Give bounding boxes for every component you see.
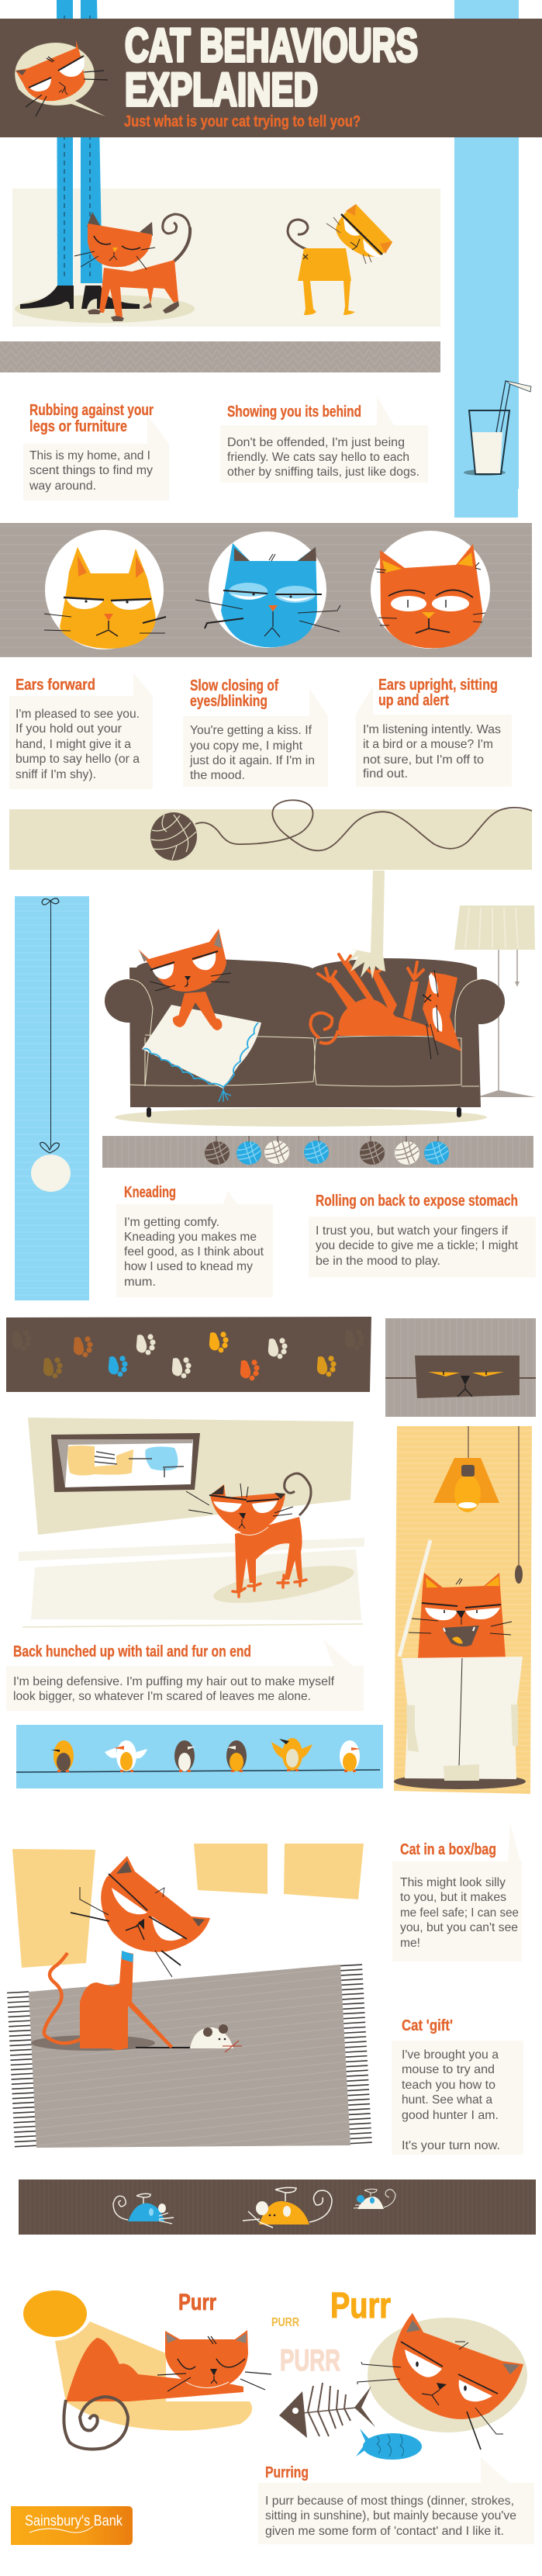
callout: ears forward: [9, 673, 153, 789]
title: EXPLAINED: [125, 64, 318, 116]
penguin 2: [105, 1740, 147, 1772]
callout: cat gift: I've brought you a: [402, 2048, 499, 2062]
callout: ears forward: Ears forward: [16, 677, 95, 694]
callout: cat in a box: Cat in a box/bag: [400, 1841, 496, 1858]
purr words: Purr: [178, 2290, 216, 2315]
purr words: [178, 2285, 391, 2377]
hanging blue panel with ball: [15, 896, 89, 1300]
callout: cat in a box: to you, but it makes: [400, 1891, 506, 1904]
yarn string: [195, 800, 532, 850]
callout: purring: [258, 2457, 534, 2544]
sleeping cat body: [66, 2338, 243, 2401]
floor lamp: [454, 905, 536, 1097]
callout: cat in a box: This might look silly: [400, 1876, 506, 1889]
callout: cat gift: good hunter I am.: [402, 2109, 499, 2122]
cat bed: [66, 2401, 252, 2431]
yellow mouse: [243, 2187, 332, 2228]
white mouse: [354, 2189, 395, 2209]
callout: showing behind: other by sniffing tails, just like dogs.: [227, 466, 419, 479]
sleeping cat head: [157, 2330, 271, 2391]
penguin 1: [51, 1740, 74, 1772]
sitting cat: [44, 1856, 210, 2050]
purr words: PURR: [271, 2316, 299, 2329]
callout: ears forward: If you hold out your: [16, 722, 123, 736]
callout: ears forward: hand, I might give it a: [16, 738, 131, 751]
callout: rolling on back: you decide to give me a tickle; I might: [316, 1239, 519, 1252]
callout: showing behind: [220, 396, 428, 483]
callout: kneading: I'm getting comfy.: [124, 1216, 219, 1229]
header banner: [0, 19, 542, 137]
framed abstract picture: [51, 1433, 200, 1492]
callout: slow closing of eyes: just do it again. If I'm in: [189, 754, 315, 767]
callout: rolling on back: be in the mood to play.: [316, 1255, 440, 1268]
rug scene with cat and mouse: [12, 1844, 364, 2148]
callout: cat gift: [371, 2017, 523, 2155]
callout: cat gift: It's your turn now.: [402, 2139, 500, 2152]
purr illustration left: sleeping cat in sun: [23, 2290, 271, 2449]
penguin 4: [226, 1740, 247, 1772]
blue cat head: slow blinking: [195, 531, 340, 648]
callout: kneading: mum.: [124, 1276, 156, 1289]
title: [125, 19, 418, 116]
callout: ears upright: it a bird or a mouse? I'm: [363, 738, 493, 751]
callout: ears upright: up and alert: [378, 692, 449, 709]
mouse: [190, 2024, 242, 2052]
pillow with blue trim: [142, 1005, 261, 1102]
rubbing orange cat: [74, 212, 190, 321]
callout: back hunched: [6, 1639, 364, 1711]
callout: purring: Purring: [265, 2464, 309, 2481]
rolling cat: [310, 954, 461, 1059]
penguin 3: [174, 1740, 195, 1772]
birds on a wire band: [16, 1725, 383, 1788]
callout: purring: I purr because of most things (dinner, strokes,: [265, 2495, 514, 2508]
callout: showing behind: Showing you its behind: [227, 403, 361, 421]
hunched orange cat: [186, 1473, 311, 1597]
callout: back hunched: Back hunched up with tail and fur on end: [13, 1643, 251, 1660]
callout: ears upright: [356, 677, 512, 787]
logo: Sainsbury's Bank: Sainsbury's Bank: [25, 2513, 123, 2529]
logo: Sainsbury's Bank: [11, 2506, 133, 2545]
yellow cat showing behind: [288, 204, 392, 315]
yarn balls band: [102, 1136, 533, 1168]
callout: kneading: [116, 1184, 273, 1297]
legs in blue trousers: [20, 0, 140, 309]
callout: slow closing of eyes: Slow closing of: [190, 677, 278, 694]
bag flap: [399, 1540, 430, 1657]
curled tail: [64, 2397, 128, 2449]
icon: yarn ball: [150, 812, 197, 860]
reaching arm and hand: [347, 871, 385, 979]
callout: ears forward: sniff if I'm shy).: [16, 768, 96, 781]
yellow cat head: ears forward: [44, 530, 166, 649]
dark cat peeking panel: [385, 1318, 536, 1417]
callout: ears upright: I'm listening intently. Was: [363, 723, 501, 736]
pendant lamp: [433, 1426, 523, 1584]
fish skeleton: [279, 2383, 375, 2438]
subtitle: Just what is your cat trying to tell you?: [124, 113, 361, 130]
orange cat in bag: [409, 1573, 512, 1658]
icon: glass of milk with straw: [464, 381, 531, 476]
purr words: Purr: [330, 2285, 391, 2325]
orange cat head: ears upright: [371, 531, 490, 649]
penguin 5: [271, 1738, 312, 1771]
sofa floor shadow: [115, 1108, 487, 1127]
callout: back hunched: I'm being defensive. I'm puffing my hair out to make myself: [13, 1675, 335, 1688]
callout: rubbing: scent things to find my: [29, 464, 153, 477]
purring cat head: [357, 2313, 527, 2450]
paw prints band: [6, 1317, 371, 1392]
decorative light blue column with glass of milk: [454, 0, 531, 518]
illustration: legs and cats scene: [12, 0, 440, 327]
callout: cat gift: mouse to try and: [402, 2063, 495, 2076]
callout: back hunched: look bigger, so whatever I'm scared of leaves me alone.: [13, 1690, 311, 1703]
callout: ears forward: bump to say hello (or a: [16, 753, 140, 766]
callout: ears upright: not sure, but I'm off to: [363, 753, 484, 767]
callout: cat gift: hunt. See what a: [402, 2093, 492, 2107]
callout: purring: sitting in sunshine), but mainly because you've: [265, 2509, 516, 2522]
wool band with yarn and string: [9, 800, 532, 870]
callout: cat gift: teach you how to: [402, 2079, 495, 2092]
wind-up mice band: [19, 2180, 536, 2235]
striped band with three cat heads: [0, 523, 532, 657]
callout: showing behind: friendly. We cats say hello to each: [227, 451, 409, 464]
callout: cat gift: Cat 'gift': [402, 2017, 453, 2034]
callout: slow closing of eyes: eyes/blinking: [190, 693, 268, 710]
purr words: PURR: [280, 2344, 340, 2377]
callout: slow closing of eyes: You're getting a kiss. If: [190, 724, 312, 737]
blue fish: [356, 2429, 422, 2460]
kneading cat: [138, 929, 231, 1030]
paper bag: [402, 1657, 523, 1781]
callout: kneading: Kneading you makes me: [124, 1231, 257, 1244]
callout: kneading: feel good, as I think about: [124, 1245, 264, 1259]
callout: ears upright: Ears upright, sitting: [378, 677, 498, 694]
callout: cat in a box: [392, 1823, 522, 1961]
callout: slow closing of eyes: you copy me, I might: [190, 739, 303, 753]
cat in bag panel: [394, 1426, 532, 1794]
penguin 6: [340, 1740, 361, 1772]
callout: purring: given me some form of 'contact' and I like it.: [265, 2525, 504, 2538]
callout: cat in a box: me feel safe; I can see: [400, 1906, 519, 1920]
callout: rubbing: [23, 402, 169, 500]
callout: rolling on back: I trust you, but watch your fingers if: [316, 1224, 509, 1238]
chevron grey band: [0, 341, 440, 372]
sun: [23, 2290, 87, 2337]
callout: rolling on back: [309, 1193, 536, 1277]
rug: [18, 1965, 361, 2148]
sun beam: [55, 2322, 166, 2405]
icon: cat in speech bubble: [15, 40, 108, 116]
callout: kneading: Kneading: [124, 1184, 176, 1201]
title: CAT BEHAVIOURS: [125, 19, 418, 71]
callout: cat in a box: me!: [400, 1937, 420, 1950]
callout: rubbing: Rubbing against your: [29, 402, 154, 419]
callout: ears upright: find out.: [363, 767, 408, 781]
callout: rubbing: way around.: [29, 480, 96, 493]
sofa: [105, 958, 505, 1117]
callout: showing behind: Don't be offended, I'm just being: [227, 436, 405, 449]
callout: kneading: how I used to knead my: [124, 1260, 253, 1273]
callout: ears forward: I'm pleased to see you.: [16, 708, 140, 721]
callout: rubbing: legs or furniture: [29, 418, 127, 435]
room scene with frightened cat: [19, 1418, 364, 1627]
callout: slow closing of eyes: [183, 677, 328, 787]
callout: rubbing: This is my home, and I: [29, 449, 150, 462]
blue mouse: [113, 2193, 174, 2224]
callout: slow closing of eyes: the mood.: [190, 769, 245, 782]
callout: cat in a box: you, but you can't see: [400, 1921, 518, 1934]
